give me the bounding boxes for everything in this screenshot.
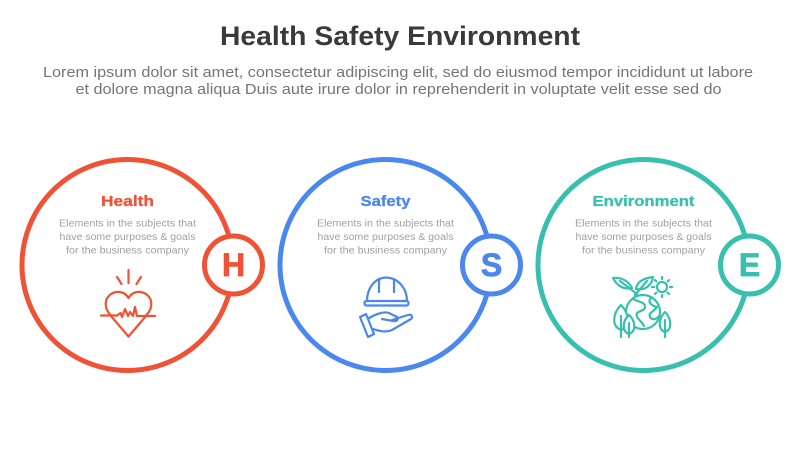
H badge: H: [222, 247, 245, 283]
icon: heart with heartbeat: [101, 270, 155, 336]
S badge: [462, 236, 520, 294]
subtitle text block: Lorem ipsum dolor sit amet, consectetur adipiscing elit, sed do eiusmod tempor incididunt ut labore: [43, 64, 753, 81]
health description: [59, 218, 196, 256]
title: Health Safety Environment: [220, 21, 580, 51]
health description: for the business company: [66, 244, 190, 256]
E badge: E: [739, 247, 760, 283]
environment description: [575, 218, 712, 256]
safety description: [317, 218, 454, 256]
panel: safety: [280, 160, 520, 370]
environment ring: [538, 160, 749, 370]
E badge: [720, 236, 778, 294]
safety heading: Safety: [360, 193, 411, 210]
S badge: S: [481, 247, 502, 283]
health description: have some purposes & goals: [60, 231, 196, 243]
icon: globe with leaves, trees and sun: [613, 277, 672, 337]
environment description: Elements in the subjects that: [575, 218, 712, 230]
environment description: for the business company: [582, 244, 706, 256]
safety ring: [280, 160, 491, 370]
subtitle text block: [43, 64, 753, 98]
subtitle text block: et dolore magna aliqua Duis aute irure dolor in reprehenderit in voluptate velit esse sed do: [76, 81, 722, 98]
safety description: have some purposes & goals: [318, 231, 454, 243]
icon: helmet on hand: [360, 278, 412, 337]
safety description: for the business company: [324, 244, 448, 256]
health description: Elements in the subjects that: [59, 218, 196, 230]
panel: health: [22, 160, 262, 370]
H badge: [204, 236, 262, 294]
health ring: [22, 160, 233, 370]
panel: environment: [538, 160, 778, 370]
environment description: have some purposes & goals: [576, 231, 712, 243]
safety description: Elements in the subjects that: [317, 218, 454, 230]
health heading: Health: [101, 193, 154, 210]
environment heading: Environment: [592, 193, 694, 210]
